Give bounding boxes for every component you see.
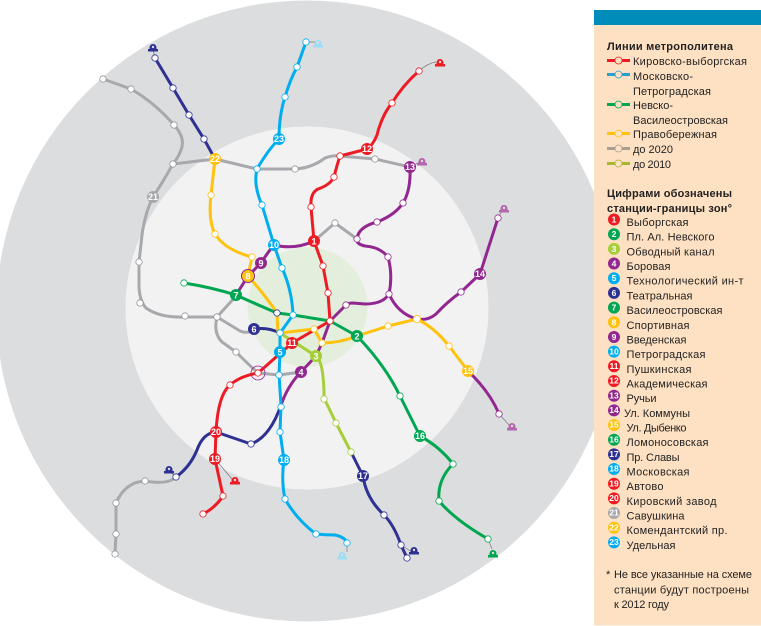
line legend: Kirovsko-Vyborgskaya: Кировско-выборгская xyxy=(633,56,747,68)
station number 13: 13 xyxy=(405,162,415,172)
station number 18 xyxy=(278,454,290,466)
item 17: Пр. Славы xyxy=(626,452,680,464)
item 20: 20 xyxy=(609,493,619,503)
item 8: 8 xyxy=(612,317,617,327)
station number 17: 17 xyxy=(358,471,368,481)
station number 22 xyxy=(209,153,221,165)
panel top bar xyxy=(594,10,761,25)
item 2: 2 xyxy=(612,229,617,239)
line legend: to 2020 xyxy=(607,144,673,156)
item 12: Академическая xyxy=(626,378,708,390)
line legend: Moskovsko-Petrogradskaya: Петроградская xyxy=(633,86,711,98)
item 3: Обводный канал xyxy=(626,246,714,258)
item 7: Василеостровская xyxy=(626,305,723,317)
station number 13 xyxy=(404,161,416,173)
station number 5 xyxy=(274,346,286,358)
station number 4: 4 xyxy=(298,368,304,378)
item 12: 12 xyxy=(609,376,619,386)
station number 16: 16 xyxy=(415,431,425,441)
item 9 xyxy=(608,331,687,346)
line: purple xyxy=(236,167,499,414)
item 10: Петроградская xyxy=(626,349,706,361)
heading: metro lines: Линии метрополитена xyxy=(607,41,734,53)
station number 2 xyxy=(351,330,363,342)
item 13 xyxy=(608,390,656,405)
station number 9 xyxy=(255,257,267,269)
item 14: 14 xyxy=(609,405,619,415)
station number 17 xyxy=(357,470,369,482)
station number 6 xyxy=(248,323,260,335)
footnote: Не все указанные на схеме xyxy=(614,569,752,581)
station number 12: 12 xyxy=(362,144,372,154)
station number 3 xyxy=(310,350,322,362)
item 13: 13 xyxy=(609,390,619,400)
line: green, Nevsko-Vasileostrovskaya xyxy=(184,283,488,539)
station number 19: 19 xyxy=(210,454,220,464)
station number 11: 11 xyxy=(287,338,297,348)
station number 12 xyxy=(361,143,373,155)
line: light blue, Moskovsko-Petrogradskaya xyxy=(256,42,347,543)
item 14: Ул. Коммуны xyxy=(624,408,690,420)
station number 19 xyxy=(209,453,221,465)
item 17: 17 xyxy=(609,449,619,459)
station number 20: 20 xyxy=(211,427,221,437)
item 4: Боровая xyxy=(626,261,671,273)
station number 1 xyxy=(308,235,320,247)
item 18: 18 xyxy=(609,464,619,474)
item 19 xyxy=(608,478,664,493)
station number 3: 3 xyxy=(313,352,319,362)
station number 23: 23 xyxy=(274,134,284,144)
item 16: 16 xyxy=(609,434,619,444)
item 11: Пушкинская xyxy=(626,364,692,376)
stations xyxy=(100,39,502,561)
item 2 xyxy=(608,228,714,244)
item 23 xyxy=(608,536,676,552)
item 22: 22 xyxy=(609,522,619,532)
item 6 xyxy=(608,287,693,302)
item 6: 6 xyxy=(612,288,617,298)
item 8: Спортивная xyxy=(626,320,690,332)
station number 22: 22 xyxy=(210,154,220,164)
station number 4 xyxy=(295,366,307,378)
station number 16 xyxy=(414,430,426,442)
item 4 xyxy=(608,258,671,273)
item 10: 10 xyxy=(609,346,619,356)
station number 20 xyxy=(210,426,222,438)
station number 11 xyxy=(286,337,298,349)
item 11: 11 xyxy=(610,361,619,371)
item 23: Удельная xyxy=(626,540,676,552)
item 15: 15 xyxy=(609,420,619,430)
station number 10: 10 xyxy=(269,240,279,250)
item 5: 5 xyxy=(612,273,617,283)
line legend: to 2020: до 2020 xyxy=(633,144,673,156)
line: yellow, Pravoberezhnaya xyxy=(210,159,468,371)
item 18 xyxy=(608,463,690,478)
line: red, Kirovsko-Vyborgskaya xyxy=(203,71,419,514)
item 5 xyxy=(608,272,744,288)
depot icons xyxy=(148,40,517,560)
item 6: Театральная xyxy=(626,290,693,302)
line legend: Nevsko-Vasileostrovskaya: Невско- xyxy=(633,100,673,112)
station number 14 xyxy=(474,268,486,280)
heading: zone boundary stations xyxy=(607,188,732,215)
footnote xyxy=(606,569,752,611)
item 1 xyxy=(608,214,689,229)
item 7: 7 xyxy=(612,303,617,313)
footnote: * xyxy=(606,569,611,581)
item 5: Технологический ин-т xyxy=(626,276,744,288)
line legend: Moskovsko-Petrogradskaya: Московско- xyxy=(633,71,693,83)
station number 23 xyxy=(273,133,285,145)
item 13: Ручьи xyxy=(626,393,656,405)
item 8 xyxy=(608,316,690,332)
station number 21: 21 xyxy=(148,192,158,202)
station number 14: 14 xyxy=(475,269,485,279)
station number 5: 5 xyxy=(277,348,283,358)
item 3 xyxy=(608,243,714,258)
footnote: станции будут построены xyxy=(614,584,749,596)
line legend: Nevsko-Vasileostrovskaya xyxy=(607,100,728,127)
item 17 xyxy=(608,448,680,464)
item 3: 3 xyxy=(612,244,617,254)
item 20: Кировский завод xyxy=(626,496,717,508)
line legend: Pravoberezhnaya: Правобережная xyxy=(633,129,717,141)
numbered station list xyxy=(608,214,744,552)
line: navy xyxy=(155,58,407,558)
footnote: к 2012 году xyxy=(614,599,670,611)
heading: zone boundary stations: Цифрами обозначены xyxy=(607,188,732,200)
heading: zone boundary stations: станции-границы зон° xyxy=(607,203,732,215)
line: lime, to 2010 xyxy=(280,333,351,452)
item 16: Ломоносовская xyxy=(626,437,709,449)
item 23: 23 xyxy=(609,537,619,547)
item 7 xyxy=(608,302,723,317)
item 21 xyxy=(608,507,685,522)
item 14 xyxy=(608,404,690,420)
item 16 xyxy=(608,434,709,449)
central zone circle xyxy=(248,247,368,367)
item 1: Выборгская xyxy=(626,217,689,229)
item 18: Московская xyxy=(626,466,690,478)
inner zone circle xyxy=(126,126,488,490)
item 15 xyxy=(608,419,686,434)
item 20 xyxy=(608,492,717,508)
station number 15 xyxy=(462,365,474,377)
line legend: to 2010: до 2010 xyxy=(633,159,671,171)
panel background xyxy=(594,10,761,626)
station number 2: 2 xyxy=(354,332,360,342)
item 1: 1 xyxy=(612,214,617,224)
station number 9: 9 xyxy=(258,258,264,268)
line legend: Moskovsko-Petrogradskaya xyxy=(607,71,711,98)
station number 8: 8 xyxy=(245,272,251,282)
item 4: 4 xyxy=(612,258,617,268)
item 9: 9 xyxy=(612,332,617,342)
item 22: Комендантский пр. xyxy=(626,525,728,537)
item 2: Пл. Ал. Невского xyxy=(626,232,714,244)
line legend: Nevsko-Vasileostrovskaya: Василеостровская xyxy=(633,115,728,127)
lines to 2020: grey xyxy=(103,79,410,554)
station number 18: 18 xyxy=(279,455,289,465)
station number 6: 6 xyxy=(251,324,257,334)
item 22 xyxy=(608,522,728,537)
station number 7: 7 xyxy=(233,290,239,300)
station number 1: 1 xyxy=(311,236,317,246)
station number 21 xyxy=(147,191,159,203)
item 19: 19 xyxy=(609,478,619,488)
item 15: Ул. Дыбенко xyxy=(626,422,686,434)
item 12 xyxy=(608,375,708,390)
legend panel xyxy=(594,10,761,626)
station number 10 xyxy=(268,239,280,251)
station number 7 xyxy=(230,289,242,301)
line legend: to 2010 xyxy=(607,159,671,171)
station number 8 xyxy=(241,269,255,283)
zone boundary station numbers on map xyxy=(147,133,486,482)
interchange ring xyxy=(251,366,265,380)
item 9: Введенская xyxy=(626,334,687,346)
item 10 xyxy=(608,346,706,361)
item 21: Савушкина xyxy=(626,510,685,522)
item 21: 21 xyxy=(609,508,619,518)
item 11 xyxy=(608,360,692,376)
station number 15: 15 xyxy=(463,366,473,376)
item 19: Автово xyxy=(626,481,664,493)
